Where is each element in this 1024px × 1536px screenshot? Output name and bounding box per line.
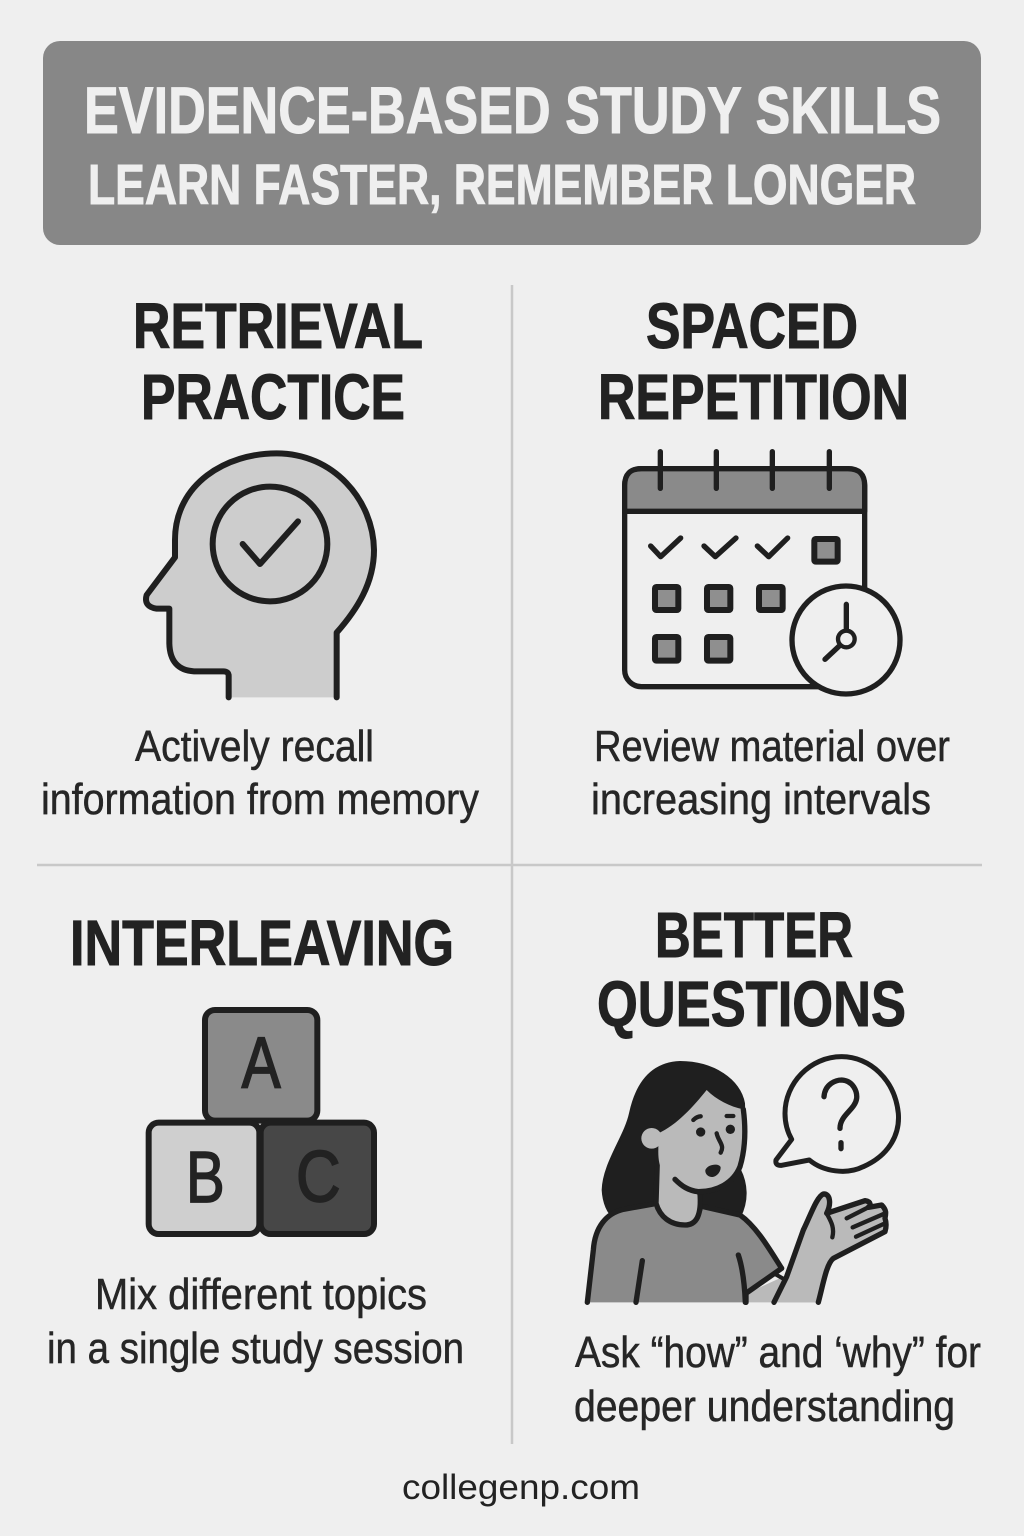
- icon: letter blocks: C: [296, 1136, 341, 1217]
- heading: better questions: [597, 899, 906, 1040]
- description: interleaving: Mix different topics: [95, 1270, 427, 1319]
- footer: website: collegenp.com: [402, 1468, 640, 1507]
- description: interleaving: in a single study session: [47, 1324, 464, 1373]
- panel: spaced repetition: [591, 290, 950, 824]
- description: better questions: [574, 1328, 981, 1431]
- heading: spaced repetition: REPETITION: [598, 361, 909, 433]
- description: retrieval practice: [41, 722, 479, 824]
- heading: retrieval practice: [133, 290, 423, 433]
- description: better questions: deeper understanding: [574, 1382, 955, 1431]
- icon: woman asking a question: [587, 1057, 899, 1302]
- heading: retrieval practice: RETRIEVAL: [133, 290, 423, 362]
- description: spaced repetition: increasing intervals: [591, 775, 931, 824]
- icon: letter blocks: A: [242, 1022, 281, 1103]
- panel: interleaving: [47, 907, 464, 1373]
- header banner: [43, 41, 981, 245]
- icon: head with check mark: [146, 453, 374, 697]
- heading: better questions: BETTER: [655, 899, 853, 971]
- heading: better questions: QUESTIONS: [597, 968, 906, 1040]
- speech bubble with question mark: [776, 1057, 899, 1171]
- heading: spaced repetition: [598, 290, 909, 433]
- panel: better questions: [574, 899, 981, 1431]
- description: spaced repetition: [591, 722, 950, 824]
- description: retrieval practice: information from memory: [41, 775, 479, 824]
- description: interleaving: [47, 1270, 464, 1373]
- heading: retrieval practice: PRACTICE: [141, 361, 405, 433]
- description: spaced repetition: Review material over: [594, 722, 950, 771]
- description: better questions: Ask “how” and ‘why” for: [575, 1328, 981, 1377]
- heading: spaced repetition: SPACED: [646, 290, 858, 362]
- icon: letter blocks: [149, 1010, 374, 1234]
- panel: retrieval practice: [41, 290, 479, 824]
- icon: letter blocks: B: [186, 1137, 225, 1218]
- description: retrieval practice: Actively recall: [135, 722, 374, 771]
- icon: calendar with clock: [625, 452, 900, 694]
- heading: interleaving: INTERLEAVING: [70, 907, 454, 979]
